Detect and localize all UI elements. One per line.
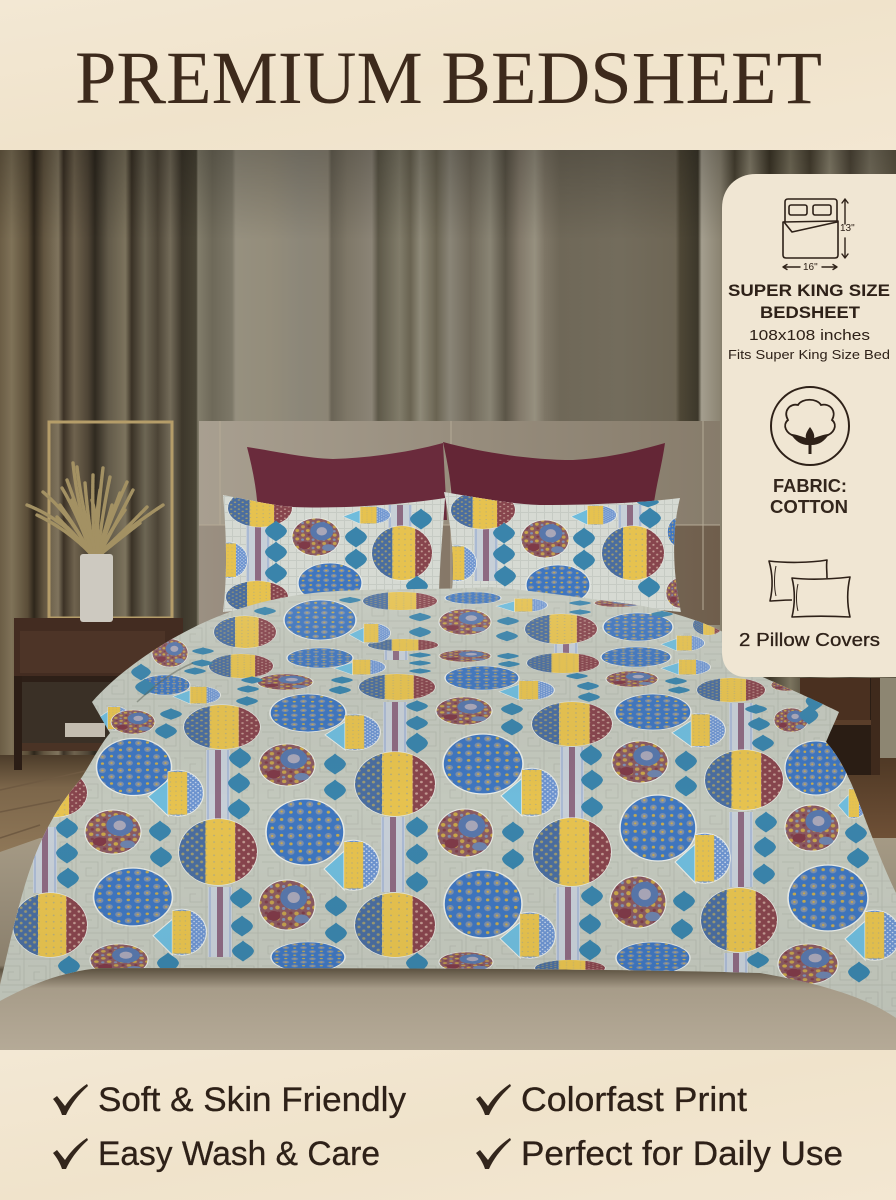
headboard bbox=[199, 421, 720, 625]
printed comforter bbox=[0, 580, 896, 1020]
title: PREMIUM BEDSHEET bbox=[75, 37, 822, 120]
left nightstand bbox=[14, 618, 183, 770]
right maroon pillow bbox=[443, 442, 665, 510]
vertical print bands bbox=[33, 640, 753, 973]
pillow covers label: 2 Pillow Covers bbox=[739, 630, 880, 650]
right nightstand bbox=[800, 678, 896, 775]
icon: bed size diagram bbox=[783, 199, 848, 270]
fit note: Fits Super King Size Bed bbox=[728, 348, 890, 362]
panel: product features bbox=[722, 174, 896, 677]
patterned right pillow bbox=[444, 492, 681, 612]
three-stripe medallions bbox=[12, 592, 784, 976]
header band bbox=[0, 0, 896, 150]
footer band bbox=[0, 1050, 896, 1200]
heading: super king size: SUPER KING SIZE bbox=[728, 281, 890, 300]
bedroom background photo scene bbox=[0, 150, 896, 1050]
wooden floor bbox=[0, 745, 896, 865]
icon: two pillows bbox=[769, 560, 850, 617]
heading: bedsheet: BEDSHEET bbox=[760, 303, 861, 322]
comforter shading bbox=[136, 592, 720, 702]
icon: cotton boll bbox=[771, 387, 849, 465]
blue diamond motifs bbox=[56, 597, 870, 982]
vase with dried plant bbox=[27, 463, 163, 622]
fabric label: FABRIC: bbox=[773, 476, 847, 496]
rug bbox=[0, 838, 896, 1050]
two-stripe medallions bbox=[95, 598, 896, 960]
gold frame bbox=[49, 422, 172, 618]
label: 13 inch height: 13" bbox=[840, 223, 855, 234]
feature: colorfast print: Colorfast Print bbox=[521, 1081, 748, 1119]
label: 16 inch width: 16" bbox=[803, 262, 818, 273]
dimension text: 108x108 inches bbox=[749, 327, 870, 344]
cotton label: COTTON bbox=[770, 497, 848, 517]
feature: easy wash and care: Easy Wash & Care bbox=[98, 1135, 380, 1173]
curtains bbox=[0, 150, 896, 770]
blue medallions bbox=[94, 592, 868, 974]
feature: perfect for daily use: Perfect for Daily Use bbox=[521, 1135, 843, 1173]
maroon back pillows bbox=[247, 442, 665, 520]
left maroon pillow bbox=[247, 443, 447, 520]
feature: soft and skin friendly: Soft & Skin Friendly bbox=[98, 1081, 406, 1119]
patterned left pillow bbox=[223, 495, 445, 612]
paisley medallions bbox=[85, 599, 839, 984]
